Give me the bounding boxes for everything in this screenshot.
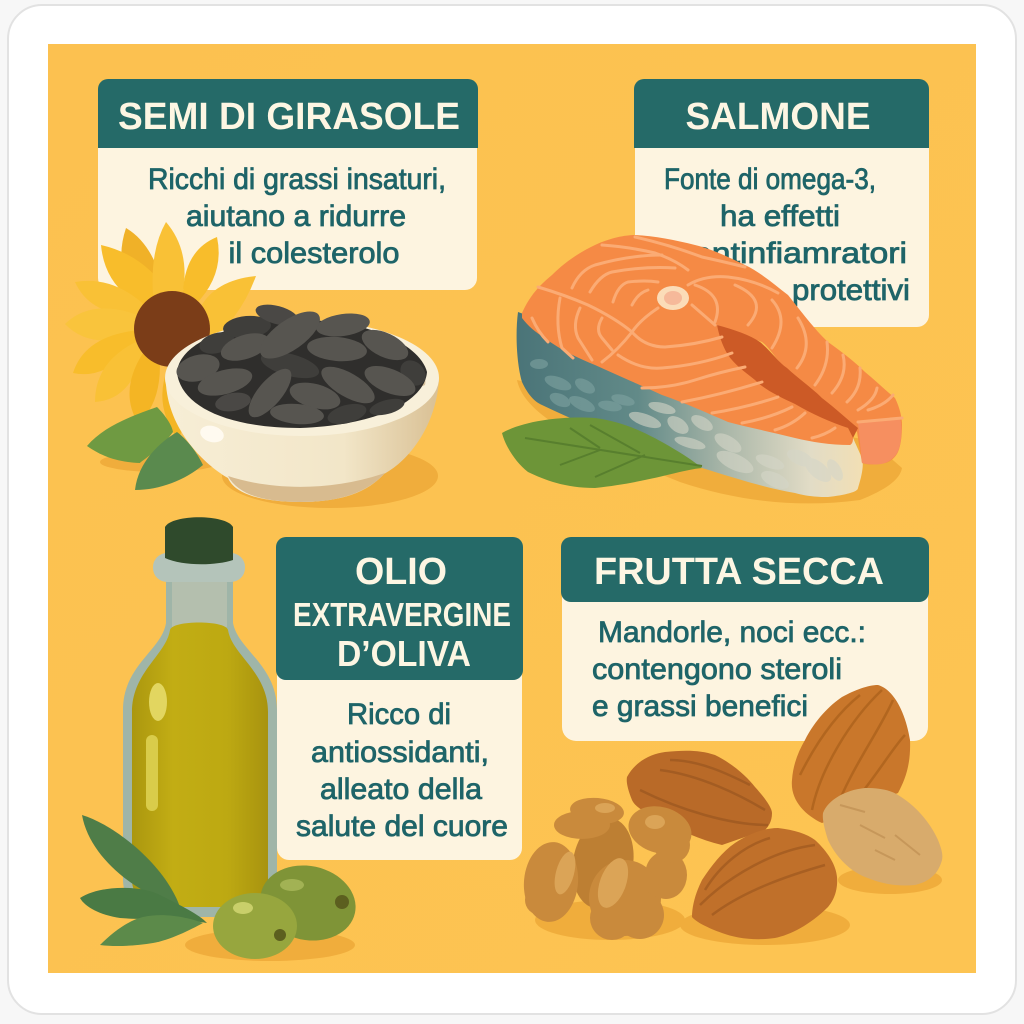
- panel: salmone text: ha effetti: [720, 200, 840, 233]
- panel: frutta secca text: e grassi benefici: [592, 690, 808, 723]
- icon: almonds and walnut: [521, 685, 942, 945]
- panel: salmone text: SALMONE: [686, 96, 870, 138]
- panel: semi di girasole text: il colesterolo: [228, 237, 400, 270]
- icon: salmon steak with leaf: [502, 235, 902, 503]
- salmon cavity: [717, 325, 858, 438]
- icon: olive oil bottle: [80, 517, 363, 961]
- panel: olio text: [276, 537, 523, 860]
- seeds: [197, 314, 431, 428]
- leaf: [502, 418, 702, 488]
- salmon skin: [517, 312, 863, 497]
- panel: salmone text: antinfiamratori: [693, 237, 907, 270]
- almond: upper right: [792, 685, 910, 823]
- olives: [253, 857, 363, 949]
- almond: lower: [692, 828, 837, 939]
- panel: olio text: alleato della: [320, 773, 482, 806]
- panel: olio text: D’OLIVA: [337, 633, 471, 674]
- olive leaves: [82, 815, 180, 907]
- panel: olio text: salute del cuore: [296, 810, 508, 843]
- panel: olio text: antiossidanti,: [311, 736, 489, 769]
- salmon centre bone: [657, 286, 689, 310]
- panel: semi di girasole text: Ricchi di grassi insaturi,: [148, 163, 446, 196]
- panel: semi di girasole text: SEMI DI GIRASOLE: [118, 96, 460, 138]
- panel: frutta secca text: contengono steroli: [592, 653, 842, 686]
- almond: left: [627, 751, 772, 845]
- panel: frutta secca text: FRUTTA SECCA: [594, 551, 884, 593]
- panel: olio text: Ricco di: [347, 698, 451, 731]
- sunflower centre: [134, 291, 210, 367]
- olive oil: [132, 622, 268, 907]
- panel: frutta secca text: [561, 537, 929, 741]
- panel: olio text: EXTRAVERGINE: [293, 596, 511, 633]
- panel: semi di girasole text: aiutano a ridurre: [186, 200, 406, 233]
- panel: salmone text: protettivi: [792, 274, 910, 307]
- panel: olio text: OLIO: [355, 551, 447, 593]
- salmon flesh: [522, 235, 902, 464]
- panel: frutta secca text: Mandorle, noci ecc.:: [598, 616, 866, 649]
- almond: pale: [823, 788, 942, 886]
- icon: sunflower and bowl of seeds: [65, 222, 439, 508]
- panel: semi di girasole text: [98, 79, 478, 290]
- panel: salmone text: Fonte di omega-3,: [664, 163, 876, 196]
- panel: salmone text: [634, 79, 929, 327]
- walnut: [521, 796, 697, 940]
